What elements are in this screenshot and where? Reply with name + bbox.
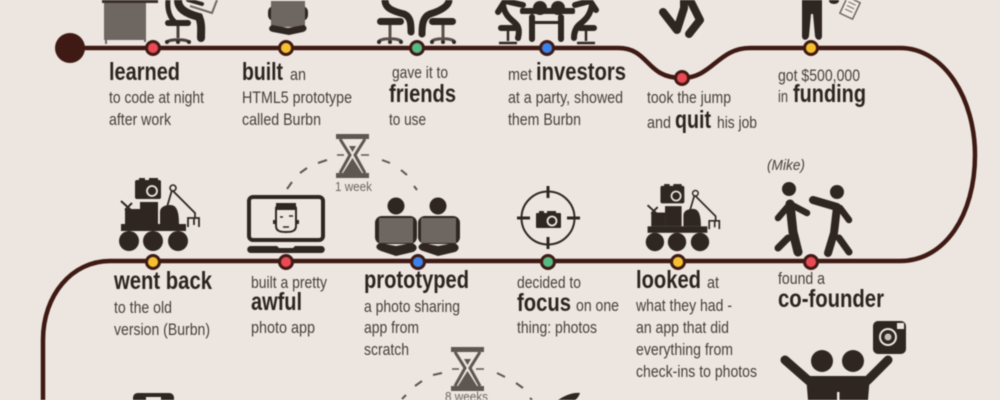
text: prototyped: prototyped [364,266,469,294]
text: prototyped: scratch [364,341,409,359]
icon: phone top [133,393,174,400]
text: quit: his job [717,114,757,132]
hourglass: 8 weeks [445,347,488,400]
icon: meeting investors at table [498,1,597,43]
label: Mike: (Mike) [767,157,805,174]
text: investors: met [508,66,532,84]
text: focus: decided to [517,274,581,292]
text: looked: check-ins to photos [636,363,757,381]
text: awful: awful [251,288,302,316]
text: quit: quit [675,106,712,134]
text: prototyped: app from [364,319,419,337]
text: went back [113,267,212,339]
icon: two walking co-founders [778,182,849,253]
text: learned: learned [109,58,180,86]
text: focus [517,274,619,337]
text: built: HTML5 prototype [242,89,352,107]
text: looked: an app that did [636,319,729,337]
text: quit: took the jump [647,89,731,107]
text: investors: them Burbn [508,111,581,129]
text: awful [251,274,328,337]
icon: camera in crosshair [517,186,580,249]
text: looked: everything from [636,341,733,359]
text: looked: at [707,274,719,292]
text: investors: at a party, showed [508,89,623,107]
text: built: called Burbn [242,111,321,129]
text: friends: friends [389,80,456,108]
text: built: built [242,58,284,86]
icon: celebrating founders [785,350,888,400]
dashed arc: 1 week [287,160,417,190]
text: co-founder: co-founder [778,285,884,313]
text: focus: on one [576,297,619,315]
text: investors [508,58,626,129]
text: learned: to code at night [109,89,204,107]
text: went back: version (Burbn) [114,321,210,339]
text: learned [109,58,204,129]
text: funding [778,67,866,108]
text: funding: got $500,000 [778,67,860,85]
text: investors: investors [536,58,626,86]
text: looked: what they had - [635,297,732,315]
text: friends [389,64,456,129]
icon: two people on chairs [377,0,456,44]
text: prototyped: a photo sharing [364,298,460,316]
text: friends: to use [389,111,426,129]
text: prototyped [364,266,469,359]
text: looked: looked [636,266,701,294]
text: awful: built a pretty [251,274,328,292]
text: quit: and [647,114,671,132]
icon: two people prototyping [375,198,460,256]
text: co-founder [778,270,884,313]
text: focus: focus [517,289,571,317]
text: focus: thing: photos [517,319,597,337]
icon: person with laptop [268,1,308,35]
icon: person holding funding document [802,0,860,40]
icon: bottom dark shape [558,393,580,400]
icon: laptop with face [247,197,325,253]
icon: jumping person [663,0,700,34]
text: built [242,58,352,129]
icon: rover again [646,184,719,251]
text: built: an [290,66,306,84]
milestone dots [146,42,818,268]
icon: rover with camera [119,178,199,251]
text: learned: after work [109,111,172,129]
icon: person coding at desk [102,0,217,44]
text: awful: photo app [251,319,315,337]
icon: Instagram logo [873,321,906,354]
text: friends: gave it to [392,64,448,82]
text: co-founder: found a [778,270,826,288]
text: went back: to the old [114,299,172,317]
text: looked [635,266,757,381]
dashed arc: 8 weeks [402,373,532,400]
text: went back: went back [113,267,212,295]
text: funding: in [778,88,788,106]
text: funding: funding [793,80,866,108]
text: quit [647,89,757,134]
hourglass: 1 week: 1 week [335,180,373,194]
hourglass: 1 week [335,134,373,194]
